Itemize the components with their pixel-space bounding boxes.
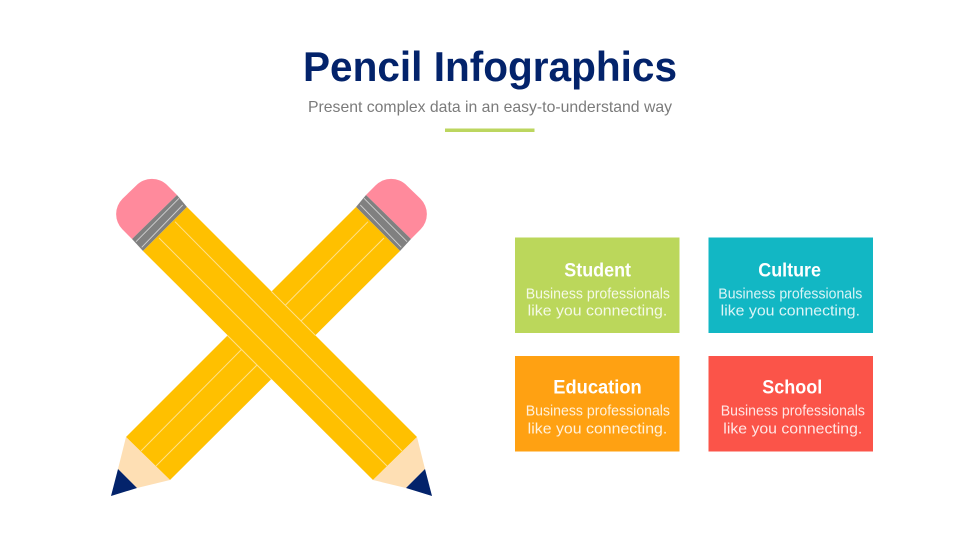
- title: Pencil Infographics: [303, 43, 677, 90]
- panel: school: [708, 356, 873, 452]
- panel: student: [515, 238, 680, 333]
- pencil: pointing bottom-left: [111, 179, 427, 496]
- lead: [406, 469, 432, 496]
- subtitle: Present complex data in an easy-to-understand way: [308, 99, 672, 116]
- wood tip: [118, 437, 170, 488]
- eraser: [366, 179, 427, 239]
- description: culture: Business professionals: [718, 285, 862, 302]
- description: school: Business professionals: [721, 403, 865, 420]
- description: education: Business professionals: [526, 403, 670, 420]
- panel: culture: [708, 238, 873, 333]
- body: [143, 207, 417, 480]
- description: culture: like you connecting.: [721, 303, 860, 320]
- eraser: [116, 179, 177, 239]
- lead: [111, 469, 137, 496]
- description: education: like you connecting.: [528, 420, 667, 437]
- heading: education: Education: [553, 378, 642, 398]
- pencil: pointing bottom-right: [116, 179, 432, 496]
- description: school: like you connecting.: [723, 420, 862, 437]
- body lines: [159, 222, 402, 466]
- body: [126, 207, 400, 480]
- description: student: Business professionals: [526, 285, 670, 302]
- heading: school: School: [762, 378, 822, 398]
- description: student: like you connecting.: [528, 303, 667, 320]
- heading: culture: Culture: [758, 261, 821, 282]
- title underline: [445, 128, 534, 132]
- heading: student: Student: [564, 261, 632, 282]
- ferrule: [356, 195, 411, 251]
- wood tip: [373, 437, 425, 488]
- body lines: [141, 222, 384, 466]
- panel: education: [515, 356, 680, 452]
- ferrule: [132, 195, 187, 251]
